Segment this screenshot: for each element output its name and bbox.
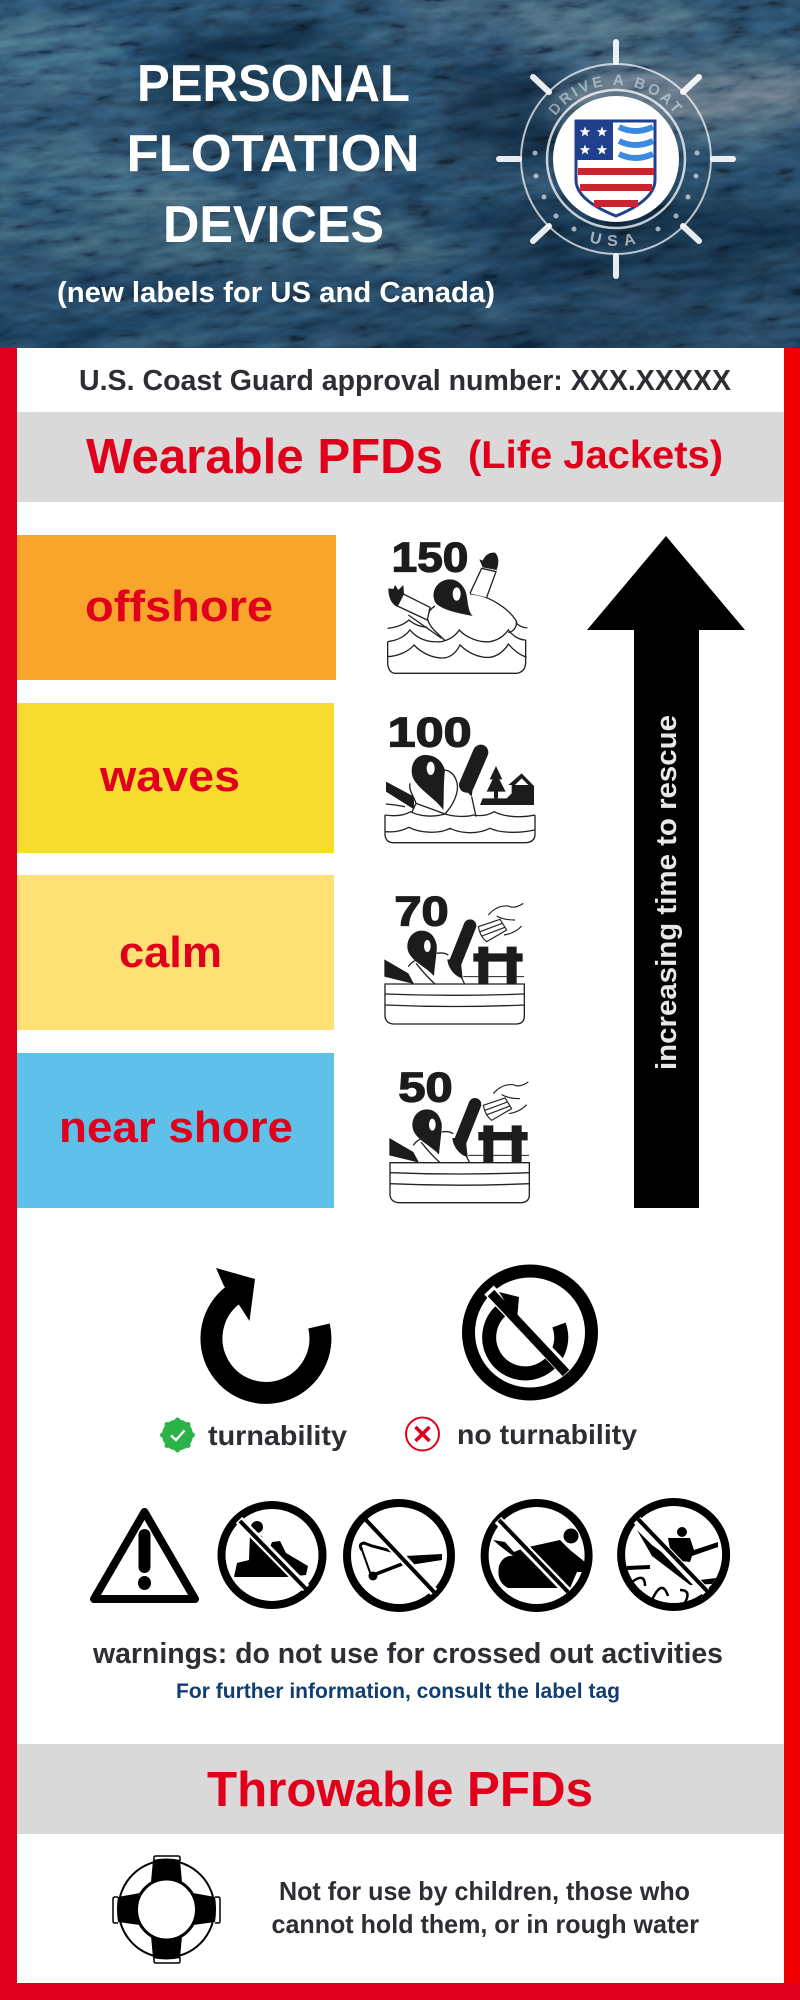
icon: type 70 person near pier: 70 [394, 888, 449, 935]
category: calm [17, 875, 334, 1030]
subtitle: (new labels for US and Canada) [57, 277, 495, 309]
heading: wearable PFDs: Wearable PFDs [86, 430, 443, 484]
title [126, 55, 420, 254]
left red border [0, 348, 17, 2000]
logo: ship wheel badge [496, 39, 736, 279]
icon: no whitewater paddling [621, 1502, 726, 1610]
logo: ship wheel badge: USA [590, 232, 636, 246]
icon: type 100 person in waves [385, 709, 535, 843]
icon: type 70 person near pier [384, 888, 524, 1024]
warnings caption: warnings: do not use for crossed out activities [92, 1638, 723, 1670]
bottom red border [0, 1983, 800, 2000]
throwable PFD note: Not for use by children, those who [279, 1876, 690, 1906]
icon: no personal watercraft [222, 1505, 322, 1605]
title: PERSONAL [137, 55, 410, 113]
icon: type 100 person in waves: 100 [388, 709, 472, 756]
category: near shore: near shore [59, 1103, 293, 1152]
icon: type 150 person in rough water [388, 534, 527, 673]
right red border [784, 348, 800, 2000]
throwable PFD note: cannot hold them, or in rough water [272, 1909, 699, 1939]
logo: ship wheel badge: DRIVE A BOAT [548, 74, 682, 116]
category: waves [17, 703, 334, 853]
icon: no turnability symbol [468, 1271, 592, 1394]
header: ocean water background [0, 0, 800, 348]
icon: no waterskiing [347, 1503, 451, 1608]
category: calm: calm [119, 928, 222, 977]
section band: throwable PFDs [17, 1744, 784, 1834]
heading: life jackets: (Life Jackets) [468, 434, 723, 477]
icon: no tubing [485, 1503, 590, 1608]
icon: type 50 person near pier: 50 [398, 1064, 453, 1111]
category: offshore [17, 535, 336, 680]
label: turnability [160, 1418, 347, 1452]
category: offshore: offshore [85, 582, 273, 631]
label: turnability: turnability [208, 1420, 347, 1451]
heading: throwable PFDs: Throwable PFDs [207, 1763, 593, 1817]
icon: life ring [113, 1856, 220, 1963]
category: waves: waves [99, 752, 240, 801]
throwable PFD note [272, 1876, 699, 1939]
icon: warning triangle [94, 1512, 195, 1599]
icon: flag shield [576, 121, 655, 216]
title: DEVICES [163, 196, 384, 254]
label: no turnability: no turnability [457, 1419, 637, 1450]
icon: turnability arrow [211, 1268, 320, 1393]
icon: red x badge [406, 1418, 439, 1450]
icon: green check badge [160, 1418, 195, 1452]
icon: type 50 person near pier [389, 1064, 529, 1203]
arrow: increasing time to rescue: increasing time to rescue [651, 715, 683, 1070]
category: near shore [17, 1053, 334, 1208]
title: FLOTATION [126, 125, 420, 183]
icon: type 150 person in rough water: 150 [392, 534, 468, 581]
further information note: For further information, consult the label tag [176, 1680, 620, 1703]
approval number line: U.S. Coast Guard approval number: XXX.XXXXX [79, 365, 732, 397]
arrow: increasing time to rescue [587, 536, 745, 1208]
section band: wearable PFDs [17, 412, 784, 502]
